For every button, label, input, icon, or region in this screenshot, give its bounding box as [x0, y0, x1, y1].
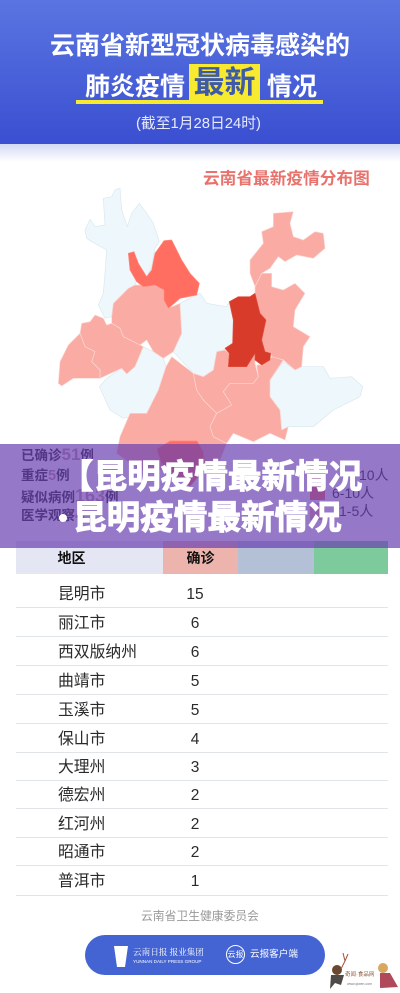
title line 1: 云南省新型冠状病毒感染的	[50, 32, 350, 60]
column: region: 地区	[58, 550, 86, 566]
column: region	[16, 541, 163, 574]
column: confirmed: 确诊	[186, 550, 214, 566]
region: Honghe	[210, 357, 288, 443]
header shadow	[0, 144, 400, 162]
row: Honghe: 红河州	[58, 816, 105, 832]
figure right	[378, 963, 398, 988]
row: Kunming: 15	[186, 586, 204, 602]
watermark figures	[330, 952, 398, 989]
row: Puer: 1	[191, 873, 199, 890]
overlay bullet	[59, 514, 67, 522]
footer logo pill	[85, 935, 325, 975]
label: over 10: 10人	[359, 467, 389, 483]
press group chinese: 云南日报 报业集团	[133, 947, 204, 957]
row: Baoshan: 保山市	[58, 730, 105, 748]
icon: Yunbao seal: 云报	[228, 950, 244, 958]
icon: press group cup	[114, 946, 128, 967]
row: Xishuangbanna: 西双版纳州	[58, 644, 137, 660]
legend: colour scale	[310, 465, 389, 520]
row: Yuxi: 5	[191, 702, 199, 718]
row: Zhaotong	[16, 837, 388, 866]
row: Xishuangbanna: 6	[191, 644, 199, 660]
row: Dali: 大理州	[58, 758, 105, 776]
swatch: 6-10	[310, 483, 325, 500]
row: Dali: 3	[191, 758, 199, 776]
region: Lijiang	[128, 240, 199, 308]
region: Zhaotong	[250, 212, 325, 287]
swatch: over 10	[310, 463, 325, 480]
icon: Yunbao seal	[226, 945, 245, 964]
watermark small print: www.qiwen.com	[347, 982, 372, 986]
overlay headline line 2: 昆明疫情最新情况	[73, 500, 342, 537]
row: Xishuangbanna	[16, 637, 388, 666]
row: Yuxi: 玉溪市	[58, 702, 105, 718]
swatch: 1-5	[310, 503, 325, 520]
title line 2 left: 肺炎疫情	[85, 73, 185, 101]
row: Kunming: 昆明市	[58, 586, 105, 602]
row: Qujing: 5	[191, 672, 199, 690]
observation count: 医学观察4	[21, 505, 84, 524]
region: Yuxi	[193, 350, 258, 413]
purple overlay band	[0, 444, 400, 548]
Yunbao client name: 云报客户端	[250, 949, 298, 960]
column: blank green	[314, 541, 388, 574]
watermark text: 奇闻·食品网	[345, 970, 375, 978]
row: Qujing	[16, 666, 388, 695]
region: northwest	[85, 188, 159, 318]
map of Yunnan	[58, 188, 363, 486]
date subtitle: (截至1月28日24时)	[136, 116, 261, 132]
row: Lijiang: 丽江市	[58, 614, 105, 632]
title line 2 right: 情况	[267, 73, 317, 101]
header banner	[0, 0, 400, 144]
row: Zhaotong: 2	[191, 844, 199, 860]
press group name	[133, 947, 204, 964]
source text: 云南省卫生健康委员会	[141, 909, 259, 923]
table rows	[16, 585, 388, 896]
region: Qujing	[255, 273, 310, 370]
region: Chuxiong	[173, 293, 233, 377]
column: blank blue	[238, 541, 314, 574]
figure left	[330, 953, 348, 989]
row: Honghe	[16, 809, 388, 838]
region: Xishuangbanna	[157, 441, 205, 486]
row: Dehong	[16, 780, 388, 809]
region: Dali	[112, 285, 182, 358]
press group english: YUNNAN DAILY PRESS GROUP	[133, 959, 202, 964]
region: Puer	[117, 357, 227, 470]
suspected count: 疑似病例163例	[21, 486, 119, 506]
row: Baoshan	[16, 724, 388, 753]
label: 1-5: 1-5人	[339, 503, 373, 519]
highlight box: 最新: 最新	[194, 65, 256, 100]
title underline	[76, 100, 323, 104]
severe count: 重症5例	[21, 468, 70, 484]
row: Lijiang: 6	[191, 614, 199, 632]
row: Lijiang	[16, 608, 388, 637]
row: Yuxi	[16, 695, 388, 724]
region: Wenshan	[270, 362, 363, 430]
region: Lincang	[99, 347, 166, 418]
legend: case totals	[21, 445, 119, 524]
row: Puer	[16, 866, 388, 896]
row: Honghe: 2	[191, 816, 199, 832]
region: Kunming	[225, 293, 271, 367]
row: Puer: 普洱市	[58, 873, 105, 890]
row: Kunming	[16, 579, 388, 608]
row: Zhaotong: 昭通市	[58, 844, 105, 860]
row: Dehong: 德宏州	[58, 786, 105, 804]
row: Baoshan: 4	[191, 730, 199, 748]
overlay headline line 1: 【昆明疫情最新情况	[60, 459, 362, 496]
row: Dali	[16, 752, 388, 781]
row: Qujing: 曲靖市	[58, 672, 105, 690]
confirmed count: 已确诊51例	[21, 445, 94, 464]
map heading: 云南省最新疫情分布图	[203, 169, 370, 188]
row: Dehong: 2	[191, 786, 199, 804]
column: confirmed	[163, 541, 238, 574]
region: Dehong	[58, 333, 100, 386]
label: 6-10: 6-10人	[332, 485, 374, 501]
table header	[16, 541, 388, 574]
region: Baoshan	[80, 315, 143, 378]
